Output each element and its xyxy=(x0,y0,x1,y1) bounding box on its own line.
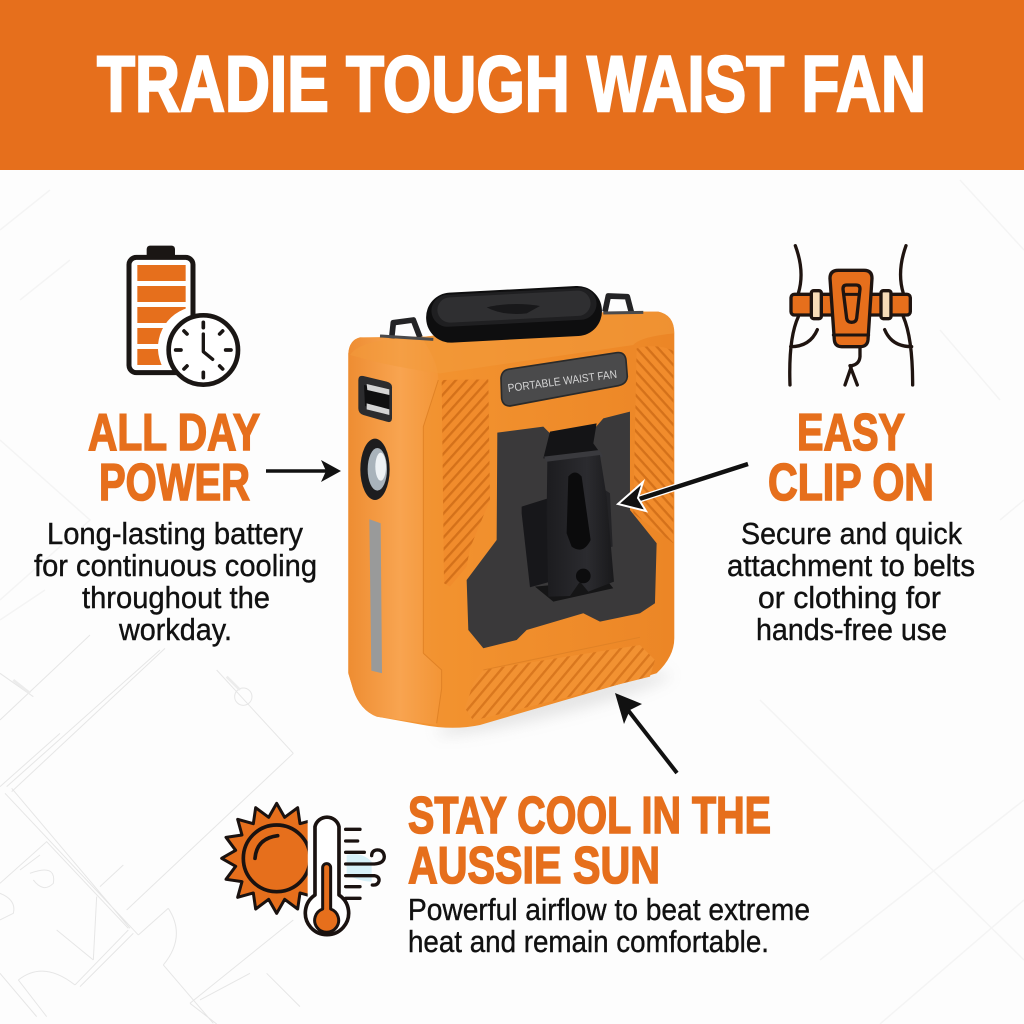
ground shadow xyxy=(434,663,673,744)
text: easy clip on description: attachment to belts xyxy=(727,548,975,583)
text: all day power description: throughout the xyxy=(82,580,270,615)
rib panel bottom xyxy=(465,645,655,721)
text: all day power description: workday. xyxy=(118,612,232,647)
strap loops xyxy=(380,296,643,339)
title banner xyxy=(0,0,1024,170)
rib panel left xyxy=(442,379,490,587)
heading: all day power xyxy=(88,404,260,512)
text: all day power description xyxy=(34,516,317,647)
text: easy clip on description xyxy=(727,516,975,647)
icon: battery with clock xyxy=(129,246,238,385)
heading: stay cool in the aussie sun: AUSSIE SUN xyxy=(408,837,660,895)
arrow: to bottom of fan xyxy=(615,693,677,773)
top bevel xyxy=(350,312,674,373)
label plate: PORTABLE WAIST FAN xyxy=(507,369,618,395)
clip backplate xyxy=(467,412,657,648)
body seam lines xyxy=(423,380,640,723)
text: stay cool description: Powerful airflow to beat extreme xyxy=(408,892,810,927)
heading: easy clip on: EASY xyxy=(797,404,905,462)
icon: sun, thermometer and wind xyxy=(222,803,384,935)
text: all day power description: Long-lasting battery xyxy=(47,516,303,551)
rib panel right xyxy=(633,346,673,543)
heading: stay cool in the aussie sun xyxy=(408,787,771,895)
usb port xyxy=(358,376,392,422)
heading: all day power: ALL DAY xyxy=(88,404,260,462)
icon: belt clip on waist xyxy=(790,246,913,385)
text: stay cool description: heat and remain comfortable. xyxy=(408,924,769,959)
text: stay cool description xyxy=(408,892,810,959)
flashlight xyxy=(360,439,390,500)
heading: all day power: POWER xyxy=(99,454,250,512)
fan nozzle xyxy=(425,285,603,344)
main body xyxy=(348,312,674,728)
text: all day power description: for continuous cooling xyxy=(34,548,317,583)
belt clip xyxy=(522,423,614,602)
text: easy clip on description: Secure and quick xyxy=(741,516,962,551)
left side face xyxy=(348,337,442,725)
arrow: to belt clip xyxy=(618,464,748,511)
product: portable waist fan xyxy=(348,285,674,744)
label plate xyxy=(501,353,627,406)
text: easy clip on description: or clothing for xyxy=(758,580,941,615)
text: easy clip on description: hands-free use xyxy=(756,612,947,647)
arrow: to flashlight side xyxy=(266,460,341,482)
heading: easy clip on xyxy=(768,404,934,512)
heading: stay cool in the aussie sun: STAY COOL IN THE xyxy=(408,787,771,845)
power indicator strip xyxy=(369,519,382,673)
heading: easy clip on: CLIP ON xyxy=(768,454,934,512)
